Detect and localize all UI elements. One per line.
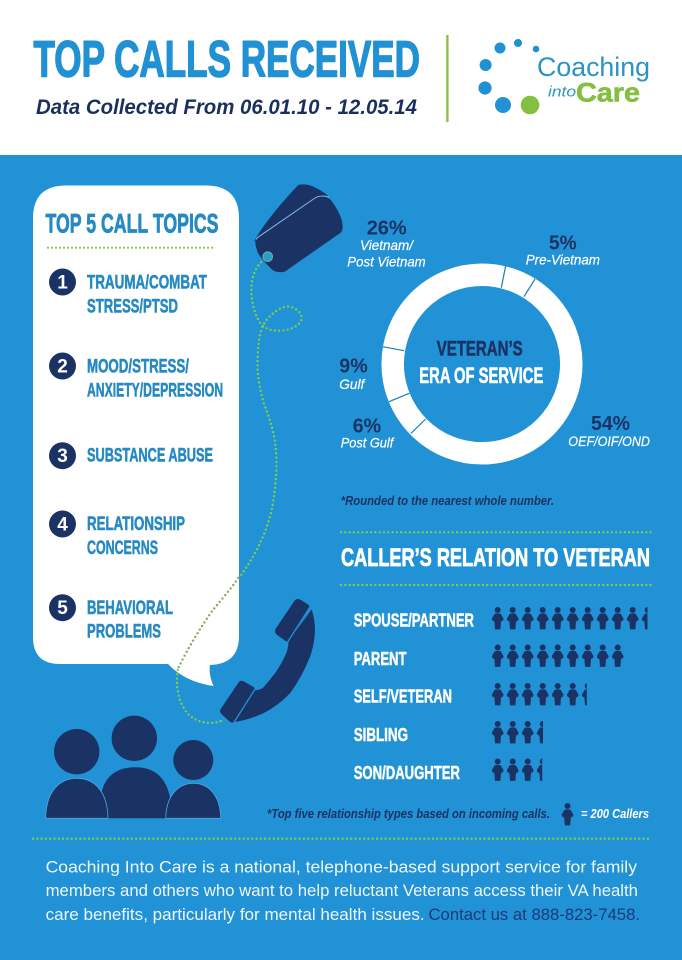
- donut chart: veteran's era of service: [383, 266, 571, 453]
- topic 5: 5: [57, 598, 68, 619]
- subtitle: date range: Data Collected From 06.01.10 - 12.05.14: [36, 96, 417, 119]
- label: 26% Vietnam / Post Vietnam: Post Vietnam: [347, 254, 426, 270]
- description paragraph: Coaching Into Care is a national, telephone-based support service for family: [46, 858, 638, 877]
- pictogram row: son/daughter: [354, 758, 542, 781]
- topic 3: SUBSTANCE ABUSE: [87, 446, 213, 467]
- topic 4: RELATIONSHIP: [87, 514, 185, 535]
- icon: phone handset bottom: [220, 599, 315, 724]
- label: 5% Pre-Vietnam: 5%: [549, 232, 577, 254]
- label: 9% Gulf: Gulf: [339, 376, 366, 392]
- topic 2: [49, 352, 223, 402]
- logo: Coaching into Care: Care: [576, 78, 640, 108]
- pictogram row: son/daughter: SON/DAUGHTER: [354, 763, 460, 783]
- topic 2: 2: [57, 356, 68, 378]
- description paragraph: Contact us at 888-823-7458.: [428, 905, 640, 924]
- header divider: [446, 35, 449, 122]
- panel: top 5 call topics speech bubble: [33, 186, 239, 686]
- label: 6% Post Gulf: [341, 415, 395, 451]
- title: TOP CALLS RECEIVED: [34, 30, 420, 87]
- label: 54% OEF/OIF/OND: [568, 413, 650, 449]
- label: 26% Vietnam / Post Vietnam: Vietnam/: [360, 237, 415, 253]
- topic 1: STRESS/PTSD: [87, 297, 178, 318]
- topic 4: 4: [57, 514, 68, 536]
- icon: phone handset top (earpiece): [254, 184, 343, 272]
- label: 9% Gulf: 9%: [339, 356, 368, 378]
- description paragraph: members and others who want to help reluctant Veterans access their VA health: [46, 881, 638, 900]
- label: 6% Post Gulf: 6%: [353, 415, 381, 437]
- description paragraph: care benefits, particularly for mental health issues.: [46, 905, 425, 924]
- label: 54% OEF/OIF/OND: OEF/OIF/OND: [568, 433, 650, 449]
- pictogram row: sibling: [354, 721, 549, 745]
- footnote: rounding: *Rounded to the nearest whole number.: [341, 494, 554, 508]
- logo: Coaching into Care: into: [548, 84, 576, 101]
- topic 5: PROBLEMS: [87, 622, 161, 643]
- label: 6% Post Gulf: Post Gulf: [341, 435, 395, 451]
- legend: person equals 200 callers: [562, 803, 649, 825]
- topic 2: ANXIETY/DEPRESSION: [87, 381, 223, 402]
- topic 2: MOOD/STRESS/: [87, 356, 190, 377]
- topic 1: 1: [57, 272, 68, 294]
- pictogram row: parent: [354, 644, 624, 669]
- label: 9% Gulf: [339, 356, 368, 392]
- description paragraph: [46, 858, 640, 924]
- topic 1: TRAUMA/COMBAT: [87, 272, 207, 293]
- donut chart: veteran's era of service: ERA OF SERVICE: [419, 363, 543, 388]
- pictogram row: parent: PARENT: [354, 649, 407, 669]
- label: 54% OEF/OIF/OND: 54%: [591, 413, 630, 435]
- pictogram row: spouse/partner: SPOUSE/PARTNER: [354, 611, 474, 631]
- topic 4: [49, 510, 185, 559]
- label: 26% Vietnam / Post Vietnam: [347, 217, 426, 270]
- donut center title: VETERAN’S: [437, 337, 523, 361]
- label: 5% Pre-Vietnam: Pre-Vietnam: [526, 251, 600, 267]
- topic 5: [49, 594, 173, 643]
- label: 5% Pre-Vietnam: [526, 232, 600, 267]
- topic 3: [49, 442, 213, 469]
- legend: person equals 200 callers: = 200 Callers: [581, 806, 649, 821]
- pictogram row: self/veteran: SELF/VETERAN: [354, 687, 452, 707]
- topic 3: 3: [57, 446, 68, 467]
- footnote: top five relationship types: *Top five relationship types based on incoming calls.: [267, 806, 550, 821]
- label: 26% Vietnam / Post Vietnam: 26%: [367, 217, 407, 239]
- heading: top 5 call topics: TOP 5 CALL TOPICS: [46, 209, 218, 239]
- pictogram row: spouse/partner: [354, 607, 654, 631]
- topic 5: BEHAVIORAL: [87, 598, 173, 619]
- pictogram row: sibling: SIBLING: [354, 725, 408, 745]
- page header band: [0, 0, 682, 155]
- pictogram row: self/veteran: [354, 683, 594, 707]
- logo: Coaching into Care: Coaching: [537, 52, 650, 82]
- topic 4: CONCERNS: [87, 538, 158, 559]
- logo: Coaching into Care: [478, 39, 650, 114]
- icon: group of people: [46, 716, 221, 818]
- phone cord: dotted line: [177, 257, 302, 723]
- topic 1: [49, 268, 207, 318]
